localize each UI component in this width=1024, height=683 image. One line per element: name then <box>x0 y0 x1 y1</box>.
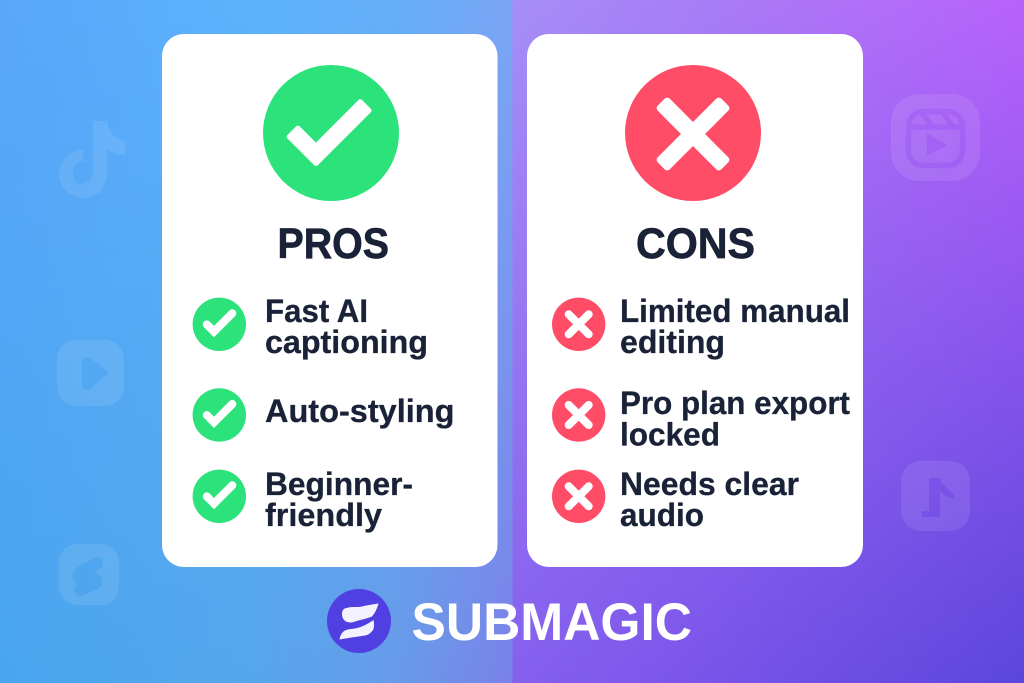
con item: limited manual editing: editing <box>620 324 725 360</box>
pro item: auto-styling: Auto-styling <box>265 393 454 429</box>
con item: needs clear audio <box>552 466 799 533</box>
pro item: beginner-friendly: Beginner- <box>265 466 413 502</box>
con item: pro plan export locked <box>552 385 850 452</box>
pro item: fast AI captioning <box>193 293 428 360</box>
pro item: beginner-friendly <box>193 466 413 533</box>
heading: CONS: CONS <box>636 220 755 268</box>
icon: TikTok watermark <box>59 121 125 198</box>
icon: music note watermark <box>901 461 970 531</box>
con item: limited manual editing: Limited manual <box>620 293 850 329</box>
panel: cons <box>527 34 863 567</box>
icon: Shorts watermark <box>59 544 119 605</box>
icon: Reels watermark <box>891 94 980 181</box>
con item: needs clear audio: audio <box>620 497 704 533</box>
pro item: fast AI captioning: captioning <box>265 324 428 360</box>
con item: pro plan export locked: locked <box>620 416 720 452</box>
icon: Submagic mark <box>327 589 391 653</box>
con item: needs clear audio: Needs clear <box>620 466 799 502</box>
icon: large red cross <box>625 65 761 201</box>
pro item: auto-styling <box>193 388 454 442</box>
brand logo: Submagic <box>327 589 692 653</box>
pro item: fast AI captioning: Fast AI <box>265 293 368 329</box>
con item: limited manual editing <box>552 293 850 360</box>
panel: pros <box>162 34 498 567</box>
wordmark: SUBMAGIC: SUBMAGIC <box>412 593 692 652</box>
heading: PROS: PROS <box>278 220 389 268</box>
icon: large green check <box>263 65 399 201</box>
pro item: beginner-friendly: friendly <box>265 497 382 533</box>
con item: pro plan export locked: Pro plan export <box>620 385 850 421</box>
icon: video play watermark <box>57 340 124 406</box>
